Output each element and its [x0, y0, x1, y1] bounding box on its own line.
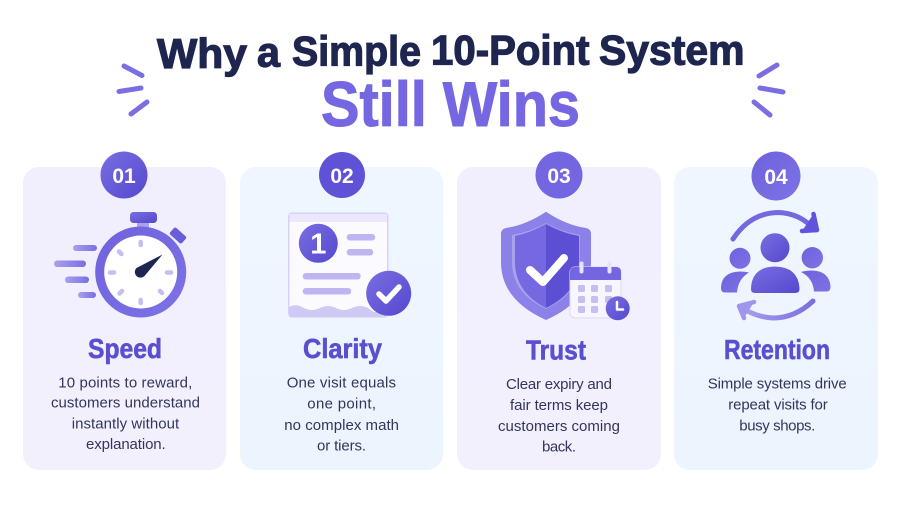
text: clarity description: One visit equals: [287, 374, 396, 391]
text: trust description: [498, 376, 620, 456]
icon: left sparkle: [119, 66, 147, 114]
text: trust description: back.: [542, 439, 576, 456]
heading: retention: Retention: [724, 334, 830, 365]
text: speed description: [51, 374, 200, 453]
text: trust description: fair terms keep: [510, 397, 608, 414]
text: clarity description: one point,: [307, 395, 376, 412]
icon: shield with calendar: [501, 212, 630, 320]
title: System: [599, 26, 744, 74]
title: Still Wins: [321, 70, 580, 140]
badge 03: 03: [547, 165, 571, 188]
title: [157, 26, 744, 140]
badge 02: 02: [330, 165, 354, 188]
icon: receipt: 1: [310, 228, 326, 260]
badge 04: [752, 152, 800, 200]
panel: retention: [674, 152, 878, 470]
badge 01: [100, 152, 148, 198]
text: retention description: repeat visits for: [728, 396, 828, 413]
panel: speed: [23, 152, 226, 470]
text: clarity description: [284, 374, 399, 455]
icon: customers in a cycle: [721, 212, 830, 318]
text: trust description: Clear expiry and: [506, 376, 612, 393]
text: retention description: [708, 375, 847, 434]
heading: clarity: Clarity: [303, 333, 382, 364]
text: retention description: Simple systems drive: [708, 375, 847, 392]
text: trust description: customers coming: [498, 418, 620, 435]
badge 04: 04: [764, 166, 788, 189]
text: speed description: 10 points to reward,: [58, 374, 192, 391]
text: speed description: explanation.: [86, 436, 166, 453]
badge 03: [536, 152, 582, 198]
panel: trust: [457, 152, 661, 470]
icon: stopwatch: [54, 212, 187, 318]
title: 10-Point: [431, 26, 590, 74]
icon: right sparkle: [754, 65, 783, 115]
icon: receipt: [288, 212, 411, 318]
text: speed description: customers understand: [51, 395, 200, 412]
heading: speed: Speed: [88, 333, 162, 364]
text: clarity description: or tiers.: [317, 438, 366, 455]
panel: clarity: [240, 152, 443, 470]
text: retention description: busy shops.: [739, 417, 815, 434]
title: a: [257, 28, 281, 76]
title: Simple: [292, 28, 421, 74]
badge 01: 01: [112, 165, 136, 188]
text: speed description: instantly without: [72, 415, 180, 432]
text: clarity description: no complex math: [284, 417, 399, 434]
badge 02: [319, 152, 365, 198]
title: Why: [157, 30, 248, 77]
heading: trust: Trust: [526, 334, 586, 365]
